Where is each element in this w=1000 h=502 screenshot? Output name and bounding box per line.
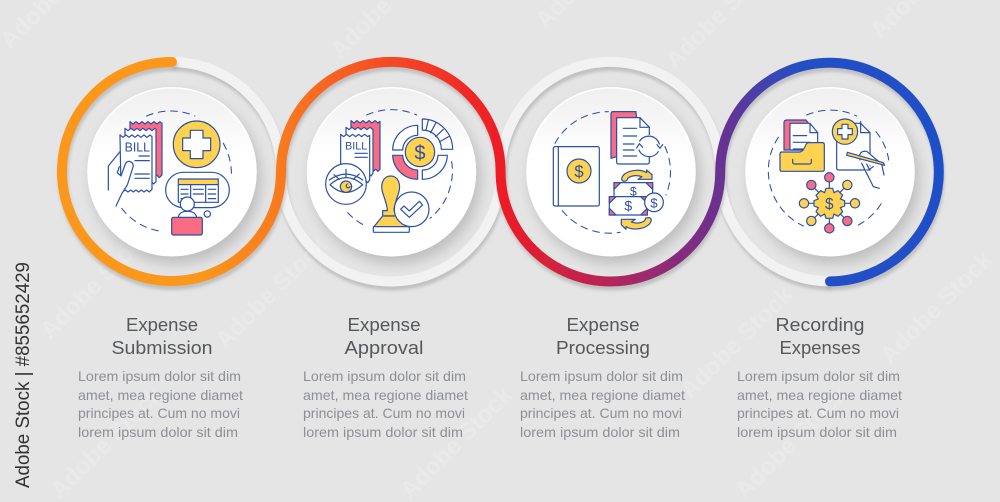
text block: step 3: lorem ipsum dolor sit dim <box>520 424 680 440</box>
text block: step 1: principes at. Cum no movi <box>78 405 240 421</box>
text block: step 2: Lorem ipsum dolor sit dim <box>303 368 466 384</box>
heading: expense approval <box>344 314 424 358</box>
heading: expense processing <box>556 314 650 358</box>
white plate 4 <box>746 88 914 256</box>
icon: ledger and money exchange: $ <box>630 185 637 199</box>
icon: ledger and money exchange <box>553 112 670 233</box>
text block: step 3: amet, mea regione diamet <box>520 387 685 403</box>
text block: step 3 <box>520 368 685 440</box>
heading: recording expenses: Recording <box>776 314 864 335</box>
heading: expense submission: Expense <box>126 314 198 335</box>
watermark: Adobe Stock <box>210 231 333 354</box>
icon: ledger and money exchange: $ <box>650 195 658 210</box>
icon: bill and add expense: BILL <box>125 141 150 155</box>
watermark: Adobe Stock <box>395 381 518 502</box>
text block: step 4: amet, mea regione diamet <box>737 387 902 403</box>
text block: step 4: lorem ipsum dolor sit dim <box>737 424 897 440</box>
heading: expense processing: Expense <box>566 314 640 335</box>
heading: expense processing: Processing <box>556 337 650 358</box>
panel: step 2 expense approval <box>308 88 476 256</box>
heading: recording expenses: Expenses <box>780 337 860 358</box>
heading: recording expenses <box>776 314 864 358</box>
text block: step 1: Lorem ipsum dolor sit dim <box>78 368 241 384</box>
light background ring arcs <box>172 62 830 281</box>
icon: ledger and money exchange: $ <box>574 162 584 181</box>
white plate 1 <box>88 88 256 256</box>
icon: bill and add expense <box>108 111 231 235</box>
panel: step 1 expense submission <box>88 88 256 256</box>
text block: step 4: Lorem ipsum dolor sit dim <box>737 368 900 384</box>
icon: bill approval: $ <box>414 142 426 164</box>
panel: step 4 recording expenses <box>746 88 914 256</box>
icon: folder, signed document and network: $ <box>825 196 834 213</box>
text block: step 3: Lorem ipsum dolor sit dim <box>520 368 683 384</box>
text block: step 2: amet, mea regione diamet <box>303 387 468 403</box>
watermark: Adobe Stock <box>730 381 853 502</box>
text block: step 2: lorem ipsum dolor sit dim <box>303 424 463 440</box>
white plate 2 <box>308 88 476 256</box>
stock credit vertical text: Adobe Stock | #855652429 <box>13 262 34 488</box>
text block: step 2 <box>303 368 468 440</box>
heading: expense submission <box>112 314 212 358</box>
text block: step 1: amet, mea regione diamet <box>78 387 243 403</box>
text block: step 4: principes at. Cum no movi <box>737 405 899 421</box>
icon: ledger and money exchange: $ <box>624 198 632 214</box>
heading: expense approval: Approval <box>344 337 424 358</box>
watermark: Adobe Stock <box>675 281 798 404</box>
watermark: Adobe Stock <box>35 221 158 344</box>
text block: step 2: principes at. Cum no movi <box>303 405 465 421</box>
text block: step 1: lorem ipsum dolor sit dim <box>78 424 238 440</box>
watermark: Adobe Stock <box>45 381 168 502</box>
serpentine gradient line <box>62 62 939 281</box>
text block: step 1 <box>78 368 243 440</box>
watermark: Adobe Stock <box>875 246 998 369</box>
heading: expense approval: Expense <box>348 314 420 335</box>
white plate 3 <box>527 88 695 256</box>
icon: folder, signed document and network <box>768 110 889 233</box>
text block: step 3: principes at. Cum no movi <box>520 405 682 421</box>
panel: step 3 expense processing <box>527 88 695 256</box>
text block: step 4 <box>737 368 902 440</box>
heading: expense submission: Submission <box>112 337 212 358</box>
icon: bill approval: BILL <box>345 140 367 152</box>
icon: bill approval <box>326 110 453 232</box>
